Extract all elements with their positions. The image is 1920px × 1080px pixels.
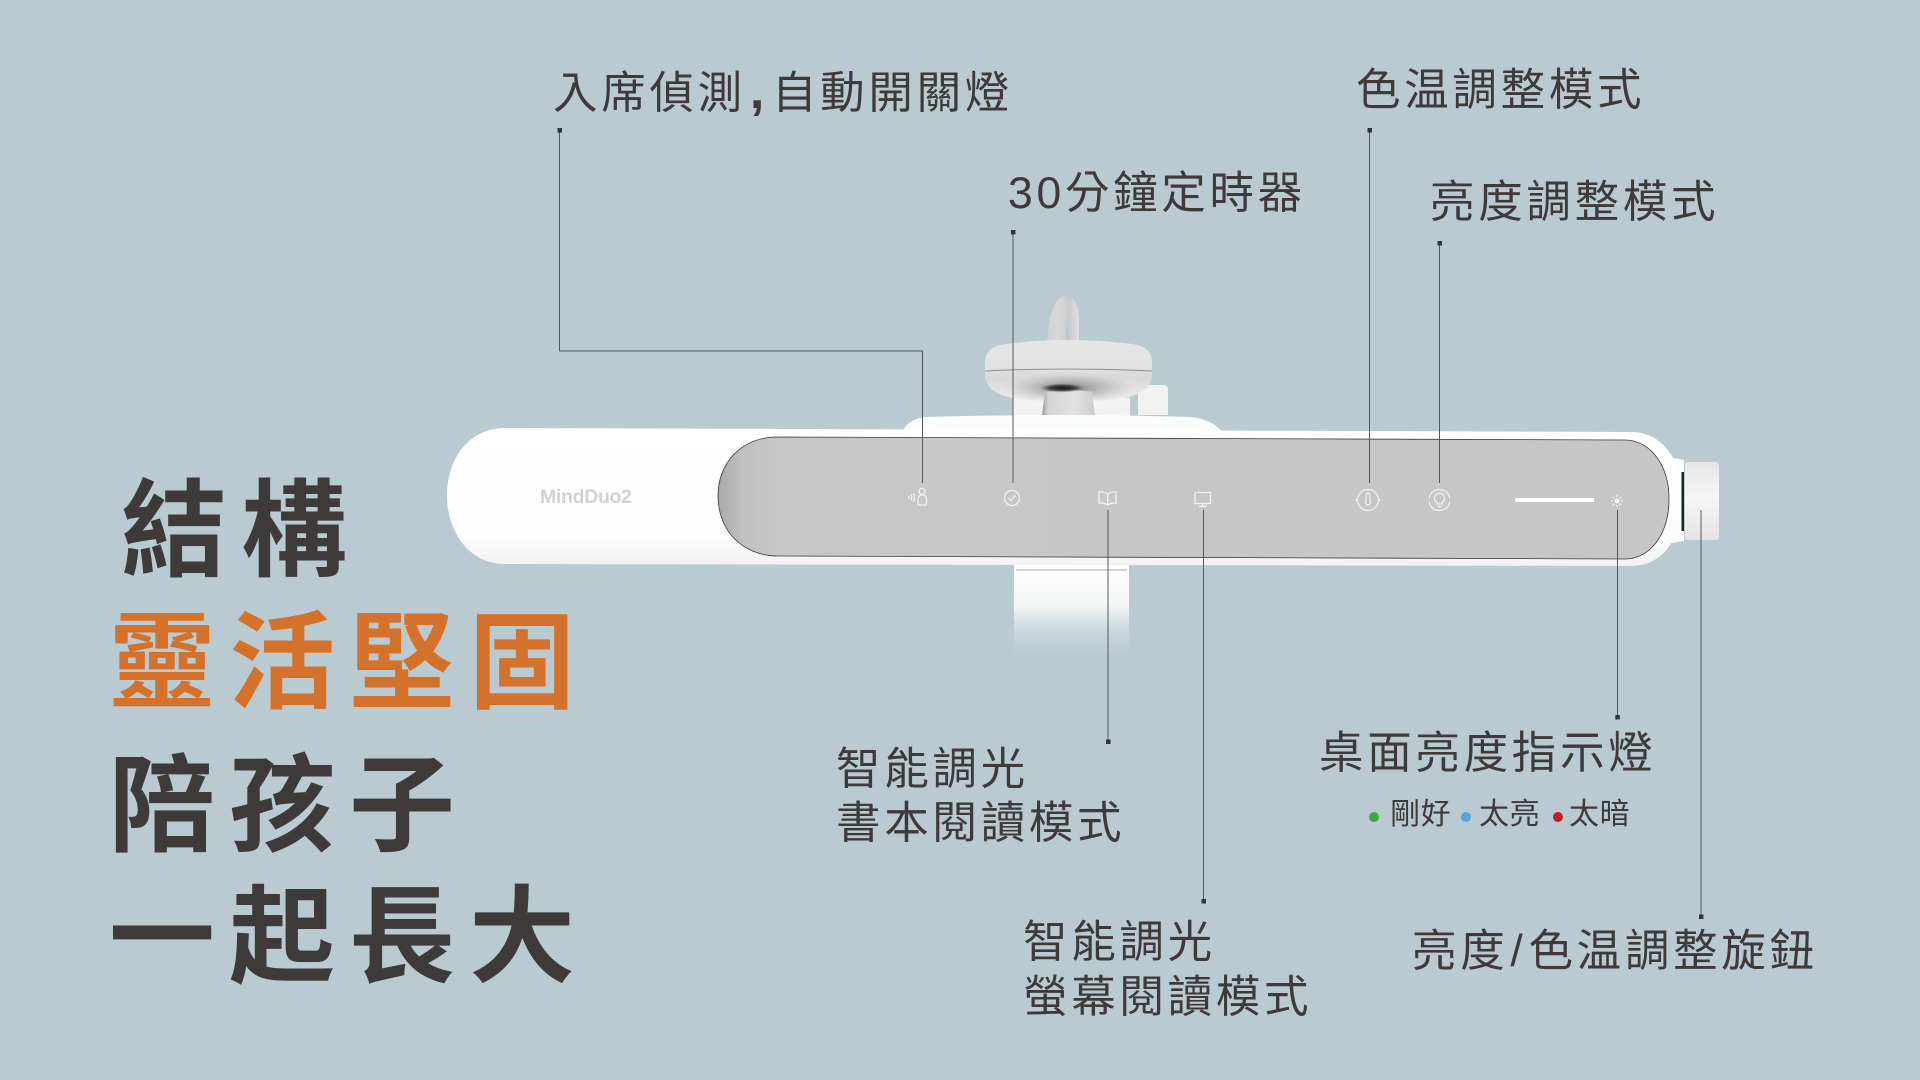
callout line: adjustment knob <box>1699 510 1704 919</box>
icon: brightness bulb <box>1429 490 1450 510</box>
legend text: too bright: 太亮 <box>1479 798 1540 831</box>
legend: indicator colors <box>1369 798 1630 831</box>
knob connector <box>1660 455 1684 545</box>
callout line: color temperature <box>1368 128 1372 483</box>
lamp base hump <box>902 415 1222 432</box>
legend dot: blue <box>1461 812 1471 822</box>
heading: grows with the child: 陪孩子 <box>109 748 469 866</box>
legend text: just right: 剛好 <box>1390 798 1451 831</box>
lamp arm body <box>447 428 1680 566</box>
label: color temperature mode: 色温調整模式 <box>1356 66 1645 115</box>
lamp stem below arm <box>1014 560 1129 662</box>
lamp round head knob <box>985 340 1152 403</box>
label: book reading mode: 智能調光 <box>836 745 1029 794</box>
brightness slider bar <box>1515 498 1594 502</box>
lamp neck <box>1042 390 1095 415</box>
heading: structure: 結構 <box>121 473 361 591</box>
callout line: brightness <box>1438 241 1442 483</box>
heading: flexible and sturdy: 靈活堅固 <box>109 605 589 723</box>
icon: open book <box>1099 492 1116 505</box>
heading: growing together: 一起長大 <box>109 879 589 997</box>
label: screen reading mode <box>1023 918 1312 1022</box>
lamp rear tab <box>1138 385 1168 415</box>
label: timer: 30分鐘定時器 <box>1008 169 1306 218</box>
lamp cable hook <box>1047 296 1079 345</box>
callout line: book mode <box>1106 510 1110 744</box>
callout line: brightness indicator <box>1615 510 1620 720</box>
display panel <box>718 437 1669 559</box>
lamp hinge block <box>1013 398 1130 416</box>
icon: presence sensor <box>908 488 926 505</box>
label: brightness and color temperature knob: 亮度/色温調整旋鈕 <box>1412 927 1818 976</box>
legend dot: red <box>1553 812 1563 822</box>
icon: color temperature <box>1355 490 1381 510</box>
legend text: too dark: 太暗 <box>1569 798 1630 831</box>
adjustment knob <box>1682 462 1719 540</box>
callout line: presence sensing <box>558 128 922 483</box>
label: screen reading mode: 智能調光 <box>1023 918 1216 967</box>
callout line: screen mode <box>1202 510 1206 904</box>
label: desk brightness indicator: 桌面亮度指示燈 <box>1319 729 1656 778</box>
label: presence sensing: 入席偵測,自動開關燈 <box>553 62 1013 120</box>
neck shadow <box>1040 384 1084 392</box>
label: book reading mode: 書本閱讀模式 <box>836 799 1125 848</box>
callout line: timer <box>1011 230 1016 483</box>
label: brightness mode: 亮度調整模式 <box>1430 178 1719 227</box>
label: screen reading mode: 螢幕閱讀模式 <box>1023 973 1312 1022</box>
label: book reading mode <box>836 745 1125 848</box>
legend dot: green <box>1369 812 1379 822</box>
icon: timer clock <box>1004 490 1020 506</box>
icon: monitor <box>1195 492 1210 506</box>
icon: light sensor sun <box>1611 495 1623 507</box>
brand mark: MindDuo2 <box>540 486 632 508</box>
